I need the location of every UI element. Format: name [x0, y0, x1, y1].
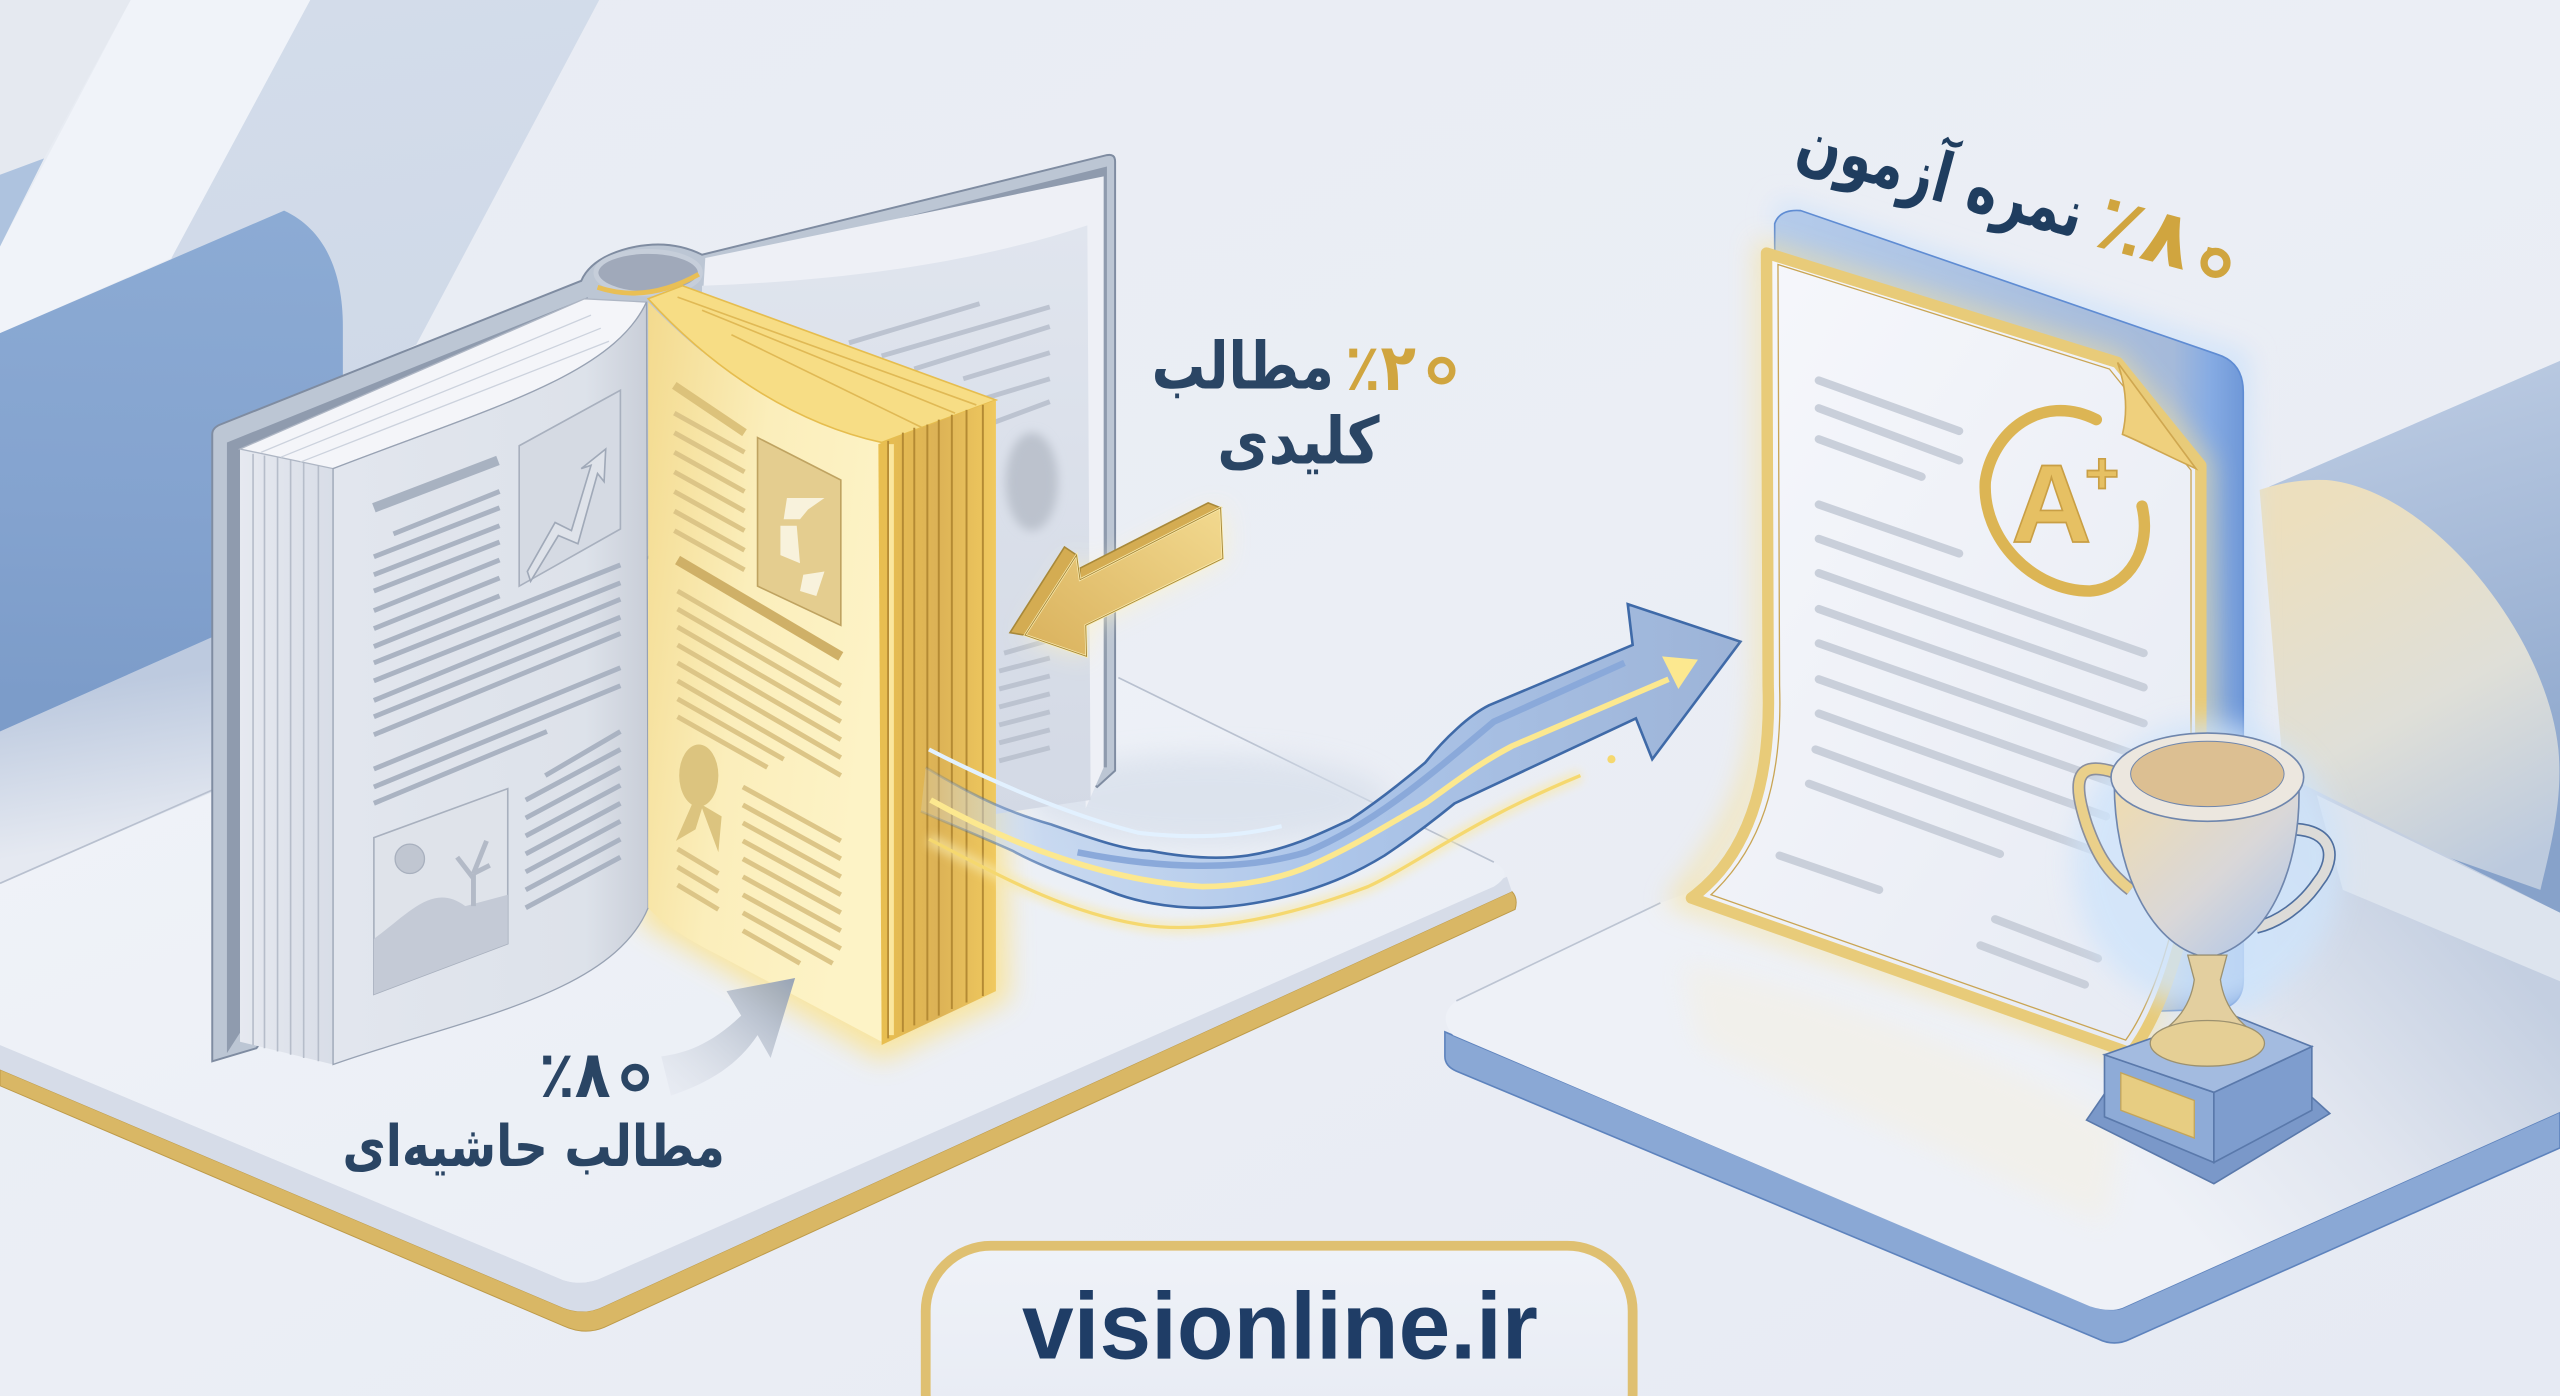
- left platform: side: [0, 877, 1512, 1312]
- flow arrow: lower yellow line: [929, 776, 1580, 927]
- book: glow: [640, 294, 1009, 1061]
- exam: blue glow: [1776, 212, 2247, 1004]
- exam: grade A+: A: [2011, 441, 2092, 566]
- label: 80% marginal content: مطالب حاشیه‌ای: [342, 1113, 725, 1180]
- book: left page: [333, 302, 648, 1065]
- exam: gold glow: [1682, 253, 2204, 1053]
- grey arrow to golden book: [661, 978, 795, 1096]
- exam document: +: [2085, 441, 2119, 506]
- exam: blue back sheet: [1775, 210, 2243, 1012]
- book: chart image: [519, 390, 620, 586]
- book: left page heading: [374, 460, 498, 508]
- exam: text lines: [1780, 380, 2144, 985]
- book: left stack: [240, 449, 333, 1065]
- label: 20% key content: [1152, 330, 1452, 480]
- label: 20% key content: مطالب: [1152, 330, 1334, 405]
- book: golden page text: [674, 413, 841, 963]
- book: golden page heading: [674, 385, 744, 433]
- book: back right page: [702, 225, 1091, 816]
- label: 80% exam score: [1789, 99, 2249, 301]
- gold arrow: side faces: [1010, 503, 1221, 635]
- flow arrow: band: [921, 604, 1740, 908]
- book: spine oval: [596, 251, 700, 294]
- label: 80% marginal content: [342, 1036, 725, 1180]
- gold arrow: glow: [1025, 508, 1223, 656]
- book: top of left pages: [240, 299, 647, 469]
- flow arrow: top facet: [1078, 663, 1624, 866]
- trophy: rim: [2111, 733, 2304, 821]
- right platform: blue side: [1445, 1032, 2560, 1343]
- website text: visionline.ir: [1022, 1273, 1538, 1379]
- trophy: glow: [2073, 722, 2341, 1009]
- label: 20% key content: کلیدی: [1217, 404, 1380, 480]
- book: medal: [676, 745, 722, 852]
- left platform: gold edge: [0, 891, 1516, 1331]
- exam: paper: [1691, 253, 2201, 1053]
- exam: folded corner: [2118, 362, 2196, 469]
- label: 80% exam score: ٪۸۰: [2087, 176, 2249, 301]
- label: 80% marginal content: ٪۸۰: [539, 1036, 647, 1113]
- trophy: foot: [2150, 1020, 2264, 1066]
- book: golden page: [648, 302, 882, 1042]
- trophy: [2073, 722, 2341, 1184]
- left platform: top: [0, 674, 1504, 1283]
- trophy: plate base: [2087, 1094, 2330, 1184]
- book: golden fore edge: [878, 400, 996, 1045]
- gold arrow: front face: [1025, 508, 1223, 656]
- book: back page lines: [849, 304, 1050, 761]
- flow arrow: outer glow: [929, 776, 1580, 927]
- trophy: pedestal: [2104, 1012, 2312, 1163]
- book: golden thick heading: [678, 560, 841, 656]
- website badge: [926, 1246, 1633, 1396]
- trophy: cup: [2114, 784, 2299, 955]
- book: golden image: [758, 438, 841, 625]
- exam document: [1682, 210, 2247, 1053]
- book: back page stack: [702, 176, 1104, 808]
- book: left page text: [374, 491, 620, 908]
- flow arrow from book to exam: [921, 604, 1740, 927]
- decorative cylinder right: [2260, 361, 2560, 923]
- right platform: top: [1446, 718, 2560, 1310]
- gold arrow pointing at book: [1010, 503, 1223, 656]
- trophy: stem: [2162, 955, 2253, 1032]
- book: landscape image: [374, 789, 508, 994]
- exam: grade ring: [1985, 411, 2144, 591]
- label: 80% exam score: نمره آزمون: [1789, 99, 2094, 255]
- left platform: [0, 674, 1516, 1331]
- trophy: handles: [2079, 769, 2329, 927]
- trophy: plaque: [2121, 1073, 2194, 1138]
- flow arrow: yellow core: [931, 679, 1669, 887]
- label: 20% key content: ٪۲۰: [1345, 330, 1451, 406]
- flow arrow: blue highlight: [929, 749, 1282, 836]
- book: golden top stack: [648, 286, 996, 442]
- book: [212, 155, 1115, 1065]
- decorative blue cylinder left: [0, 211, 343, 731]
- right platform: [1445, 718, 2560, 1343]
- book: seal shadow: [1006, 433, 1058, 531]
- book: cover: [212, 155, 1115, 1061]
